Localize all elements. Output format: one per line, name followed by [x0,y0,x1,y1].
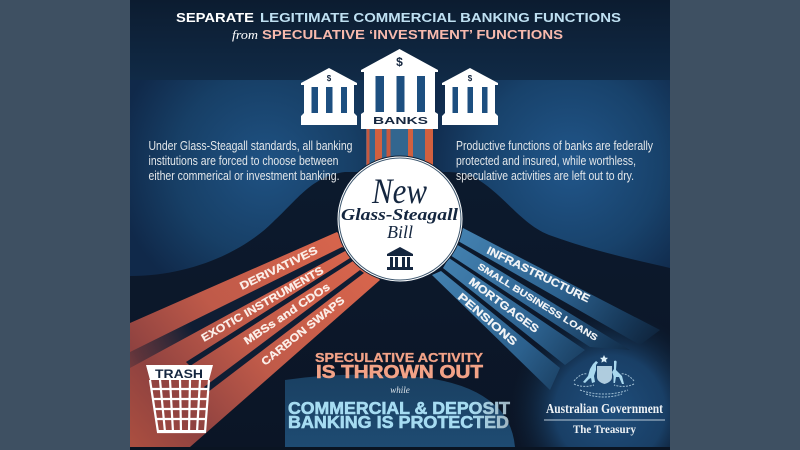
circle: New Glass-Steagall Bill: Glass-Steagall [341,205,458,224]
blue glow: crest area [510,310,670,447]
title: SEPARATE [176,10,254,25]
icon: center bank: $ [396,55,403,69]
main background panel [130,0,670,450]
divider rule [544,420,665,421]
text block: right: speculative activities are left out to dry. [456,168,634,183]
label: derivatives: DERIVATIVES [238,245,320,293]
label: pensions: PENSIONS [455,291,519,348]
callout: speculative activity [315,351,484,382]
red rays: speculative functions [130,232,380,447]
title: SPECULATIVE ‘INVESTMENT’ FUNCTIONS [262,27,563,42]
side margin right [670,0,800,450]
text block: right [456,138,653,183]
text block: right: Productive functions of banks are federally [456,138,653,153]
side margin left [0,0,130,450]
label: infrastructure: INFRASTRUCTURE [485,245,592,305]
label: MBSs and CDOs: MBSs and CDOs [242,281,332,347]
blue rays: commercial functions [432,228,660,390]
icon: left bank [301,68,357,125]
text block: left: institutions are forced to choose between [148,153,338,168]
text: Australian Government: Australian Government [546,401,663,416]
title [176,10,621,42]
icon: left bank: $ [327,74,332,83]
icon: small bank [387,247,413,270]
icon: center bank [361,49,438,129]
circle: New Glass-Steagall Bill: Bill [387,222,413,242]
callout: speculative activity: IS THROWN OUT [316,362,483,382]
callout: commercial banking protected [288,398,510,432]
text block: left: either commerical or investment banking. [148,168,340,183]
icon: right bank [442,68,498,125]
callout: commercial banking protected: BANKING IS PROTECTED [288,412,509,432]
callout: speculative activity: SPECULATIVE ACTIVITY [315,351,484,365]
icon: coat of arms [574,355,634,397]
text block: right: protected and insured, while worthless, [456,153,636,168]
banks label: BANKS [373,115,428,127]
circle: New Glass-Steagall Bill: New [371,171,427,211]
label: small business loans: SMALL BUSINESS LOANS [476,261,599,343]
text block: left [148,138,352,183]
circle: New Glass-Steagall Bill [337,156,463,282]
title: LEGITIMATE COMMERCIAL BANKING FUNCTIONS [260,10,621,25]
blue panel behind protected text [285,375,515,447]
text block: left: Under Glass-Steagall standards, all banking [148,138,352,153]
label: carbon swaps: CARBON SWAPS [259,295,347,368]
label: mortgages: MORTGAGES [466,276,541,336]
callout: commercial banking protected: COMMERCIAL & DEPOSIT [288,398,510,418]
label: exotic instruments: EXOTIC INSTRUMENTS [200,265,326,345]
icon: trash basket [146,365,213,433]
text: The Treasury: The Treasury [573,422,636,436]
title: from [232,27,258,42]
icon: right bank: $ [468,74,473,83]
stripes below banks [366,125,433,170]
text: while: while [390,385,410,395]
icon: trash basket: TRASH [155,369,203,381]
